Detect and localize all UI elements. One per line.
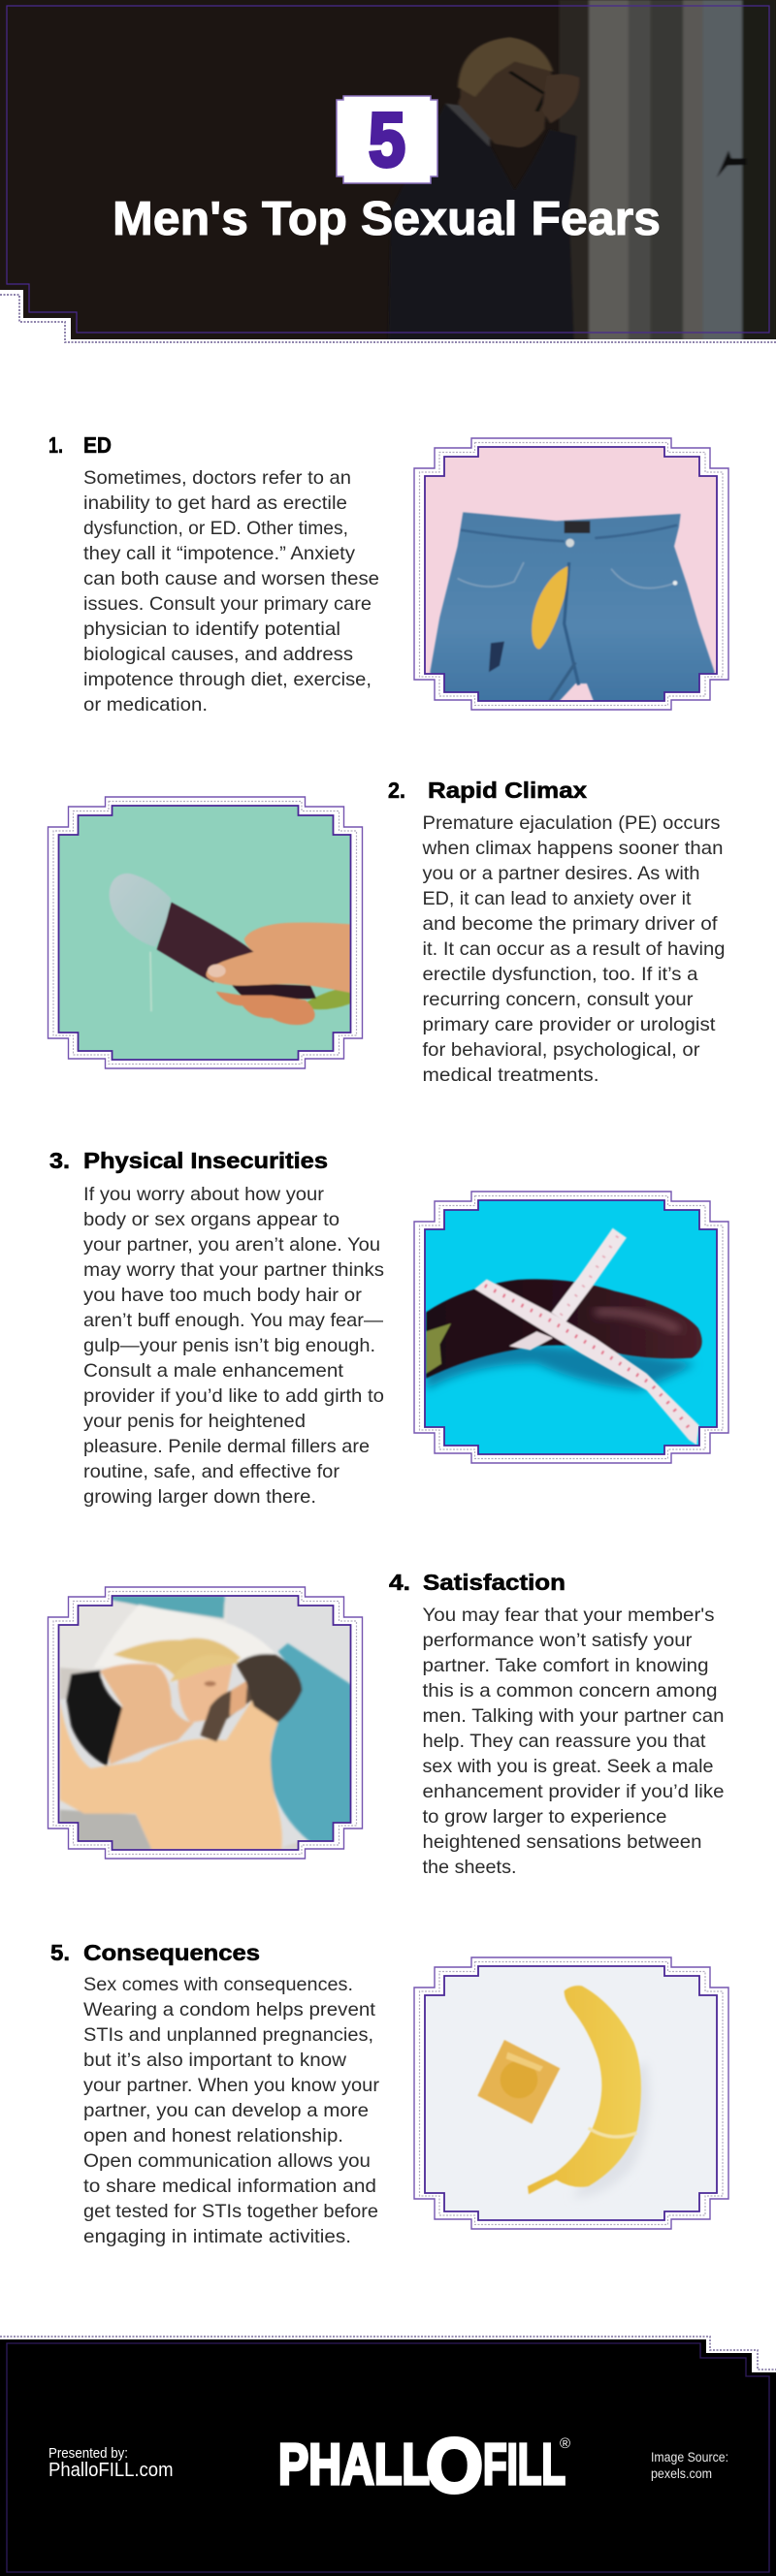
text block: this is a common concern among bbox=[423, 1680, 718, 1701]
image source: pexels.com bbox=[651, 2466, 712, 2481]
text block: You may fear that your member's bbox=[423, 1605, 715, 1626]
logo: PHALLOFILL: FILL bbox=[483, 2433, 566, 2496]
text block bbox=[83, 1974, 380, 2247]
text block: inability to get hard as erectile bbox=[83, 493, 347, 514]
text block: ED, it can lead to anxiety over it bbox=[423, 888, 692, 909]
text block: heightened sensations between bbox=[423, 1831, 702, 1853]
text block: your partner. When you know your bbox=[83, 2075, 380, 2096]
text block: physician to identify potential bbox=[83, 619, 340, 640]
image source: Image Source: bbox=[651, 2450, 728, 2465]
presented by: PhalloFILL.com bbox=[48, 2460, 173, 2481]
panel: Satisfaction bbox=[46, 1570, 724, 1878]
heading: 2. bbox=[388, 778, 405, 803]
text block: Sex comes with consequences. bbox=[83, 1974, 353, 1995]
text block: provider if you’d like to add girth to bbox=[83, 1385, 384, 1407]
text block: they call it “impotence.” Anxiety bbox=[83, 543, 355, 564]
text block: engaging in intimate activities. bbox=[83, 2226, 351, 2247]
text block bbox=[423, 1605, 724, 1878]
text block: Premature ejaculation (PE) occurs bbox=[423, 812, 721, 834]
heading: Satisfaction bbox=[423, 1570, 566, 1595]
text block bbox=[83, 467, 379, 716]
text block: body or sex organs appear to bbox=[83, 1209, 340, 1230]
text block bbox=[83, 1184, 384, 1508]
frame border bbox=[414, 1957, 728, 2229]
text block: and become the primary driver of bbox=[423, 913, 718, 935]
text block: Consult a male enhancement bbox=[83, 1360, 344, 1382]
text block: your penis for heightened bbox=[83, 1411, 306, 1432]
text block: primary care provider or urologist bbox=[423, 1014, 716, 1035]
presented by bbox=[48, 2446, 173, 2481]
text block: for behavioral, psychological, or bbox=[423, 1039, 700, 1061]
frame border bbox=[48, 1587, 363, 1859]
heading: 3. bbox=[49, 1148, 70, 1173]
text block: performance won’t satisfy your bbox=[423, 1630, 693, 1651]
text block: issues. Consult your primary care bbox=[83, 593, 372, 615]
text block: it. It can occur as a result of having bbox=[423, 938, 726, 960]
text block: gulp—your penis isn’t big enough. bbox=[83, 1335, 375, 1356]
title: Men's Top Sexual Fears bbox=[113, 193, 661, 245]
text block: Open communication allows you bbox=[83, 2150, 371, 2172]
text block: If you worry about how your bbox=[83, 1184, 325, 1205]
text block: partner. Take comfort in knowing bbox=[423, 1655, 708, 1676]
text block: partner, you can develop a more bbox=[83, 2100, 369, 2121]
text block: sex with you is great. Seek a male bbox=[423, 1756, 714, 1777]
logo: PHALLOFILL: PHALL bbox=[278, 2433, 430, 2496]
image source bbox=[651, 2450, 728, 2481]
heading bbox=[48, 432, 112, 458]
panel: Physical Insecurities bbox=[49, 1148, 730, 1508]
heading: Consequences bbox=[83, 1940, 260, 1965]
text block: open and honest relationship. bbox=[83, 2125, 343, 2147]
text block: to share medical information and bbox=[83, 2176, 376, 2197]
header border lines bbox=[0, 6, 776, 342]
framed image: hand holding eggplant bbox=[46, 795, 363, 1073]
text block: but it’s also important to know bbox=[83, 2050, 347, 2071]
text block: routine, safe, and effective for bbox=[83, 1461, 340, 1482]
panel: Consequences bbox=[50, 1940, 730, 2247]
text block: men. Talking with your partner can bbox=[423, 1705, 724, 1727]
text block bbox=[421, 812, 726, 1086]
text block: your partner, you aren’t alone. You bbox=[83, 1234, 380, 1256]
footer border lines bbox=[0, 2337, 776, 2572]
framed image: couple embracing in bed bbox=[46, 1583, 363, 1868]
text block: growing larger down there. bbox=[83, 1486, 316, 1508]
badge: number 5 bbox=[337, 96, 437, 183]
heading: Physical Insecurities bbox=[83, 1148, 328, 1173]
text block: to grow larger to experience bbox=[423, 1806, 667, 1828]
text block: aren’t buff enough. You may fear— bbox=[83, 1310, 384, 1331]
heading: 5. bbox=[50, 1940, 70, 1965]
logo: PHALLOFILL: O bbox=[426, 2422, 483, 2508]
footer background bbox=[0, 2339, 776, 2576]
badge: number 5: 5 bbox=[369, 96, 405, 182]
text block: get tested for STIs together before bbox=[83, 2201, 378, 2222]
text block: you have too much body hair or bbox=[83, 1285, 363, 1306]
heading: 4. bbox=[389, 1570, 410, 1595]
text block: biological causes, and address bbox=[83, 644, 353, 665]
header banner bbox=[0, 0, 776, 342]
text block: STIs and unplanned pregnancies, bbox=[83, 2024, 373, 2046]
frame border bbox=[414, 1192, 728, 1463]
text block: dysfunction, or ED. Other times, bbox=[83, 518, 348, 539]
panel: Rapid Climax bbox=[46, 778, 726, 1086]
heading: ED bbox=[83, 432, 112, 458]
text block: medical treatments. bbox=[423, 1065, 599, 1086]
text block: enhancement provider if you’d like bbox=[423, 1781, 724, 1802]
text block: or medication. bbox=[83, 694, 208, 716]
text block: when climax happens sooner than bbox=[421, 838, 724, 859]
logo: PHALLOFILL bbox=[278, 2422, 570, 2508]
footer bbox=[0, 2337, 776, 2576]
text block: you or a partner desires. As with bbox=[423, 863, 700, 884]
heading: Rapid Climax bbox=[428, 778, 587, 803]
logo: PHALLOFILL: ® bbox=[560, 2435, 570, 2452]
text block: recurring concern, consult your bbox=[423, 989, 694, 1010]
presented by: Presented by: bbox=[48, 2446, 128, 2462]
text block: help. They can reassure you that bbox=[423, 1731, 706, 1752]
framed image: eggplant with measuring tape bbox=[414, 1186, 730, 1471]
frame border bbox=[414, 438, 728, 710]
text block: may worry that your partner thinks bbox=[83, 1259, 384, 1281]
panel: ED bbox=[48, 432, 730, 716]
text block: erectile dysfunction, too. If it’s a bbox=[423, 964, 698, 985]
text block: the sheets. bbox=[423, 1857, 516, 1878]
heading: 1. bbox=[48, 432, 63, 458]
header photo: man leaning against a wall bbox=[0, 0, 776, 342]
framed image: banana in jeans bbox=[414, 436, 730, 715]
text block: impotence through diet, exercise, bbox=[83, 669, 372, 690]
framed image: banana with condom bbox=[414, 1952, 730, 2237]
text block: Wearing a condom helps prevent bbox=[83, 1999, 376, 2020]
frame border bbox=[48, 797, 363, 1068]
text block: Sometimes, doctors refer to an bbox=[83, 467, 351, 489]
text block: can both cause and worsen these bbox=[83, 568, 379, 589]
text block: pleasure. Penile dermal fillers are bbox=[83, 1436, 370, 1457]
